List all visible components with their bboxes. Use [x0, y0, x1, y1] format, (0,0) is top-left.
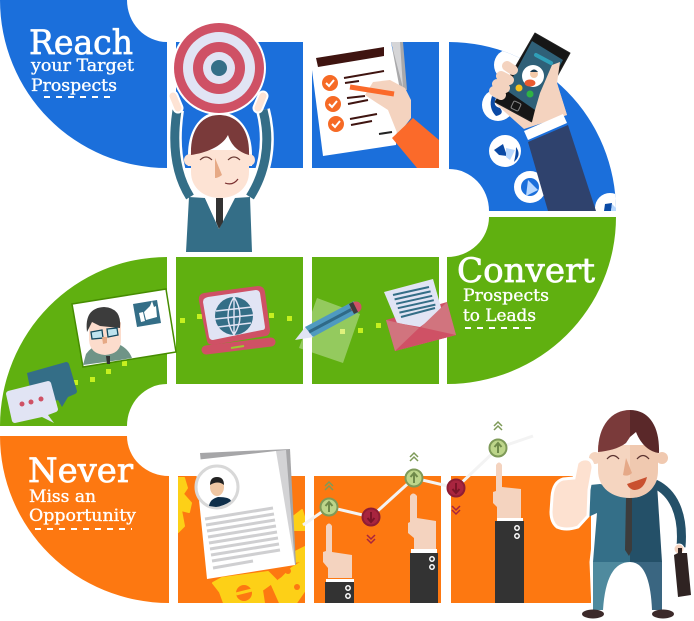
thumb and palm front: [525, 62, 567, 128]
avatar: [209, 477, 231, 507]
heading: Convert Prospects to Leads: Prospects: [463, 286, 549, 306]
tie: [216, 198, 223, 229]
blue quarter panel: [0, 0, 167, 168]
green left curve panel: [0, 257, 167, 426]
call buttons: [516, 84, 522, 92]
blue right curve panel: [449, 42, 616, 211]
page fold: [276, 450, 295, 565]
shirt collar: [204, 196, 235, 229]
teal bubble: [27, 362, 77, 408]
hands: [173, 96, 263, 108]
phone body: [495, 33, 570, 122]
heading: Reach your Target Prospects: Reach: [29, 23, 133, 63]
palm behind phone: [496, 66, 567, 129]
green right curve panel: [447, 217, 616, 384]
orange tile 2: [314, 476, 441, 603]
sheet dots: [340, 329, 345, 334]
icon: pointing hand 2: [408, 494, 438, 603]
icon: businessman thumbs up: [551, 410, 691, 618]
line chart: ups and downs: [303, 422, 533, 543]
hand: [365, 80, 411, 135]
icon: profile card with like: [72, 289, 176, 367]
translucent sheet: [299, 298, 360, 363]
paper shadow: [392, 42, 407, 90]
heading: Reach your Target Prospects: Prospects: [31, 76, 117, 96]
phone screen: [506, 41, 563, 110]
heading: Never Miss an Opportunity: Opportunity: [29, 506, 136, 526]
heading: Never Miss an Opportunity: Miss an: [29, 487, 96, 507]
hair left: [598, 410, 630, 452]
flap: [395, 327, 456, 351]
icon: resume document: [195, 449, 296, 579]
glasses: [91, 328, 118, 339]
face right: [630, 445, 658, 498]
right arm: [655, 484, 681, 547]
shoulders: [83, 344, 132, 365]
eyes: [200, 157, 240, 160]
tie: [625, 498, 632, 556]
up marker 3: [490, 422, 506, 456]
heading: Never Miss an Opportunity: Never: [28, 451, 134, 491]
torso left: [586, 484, 630, 562]
tie: [106, 356, 110, 364]
screen bar: [536, 55, 551, 63]
down marker 1: [362, 508, 380, 543]
globe: [215, 297, 253, 335]
lavender bubble: [6, 381, 58, 423]
orange tile 3: [451, 476, 591, 603]
left pant leg: [593, 562, 630, 610]
briefcase: [674, 548, 691, 597]
sleeve arm: [528, 125, 596, 211]
envelope front: [386, 302, 456, 351]
face: [89, 322, 121, 355]
briefcase hand: [674, 544, 684, 554]
nose: [623, 458, 632, 476]
heading: Convert Prospects to Leads: Convert: [457, 251, 595, 291]
head outline: [189, 113, 251, 165]
smile: [225, 179, 238, 184]
eraser: [350, 302, 362, 312]
letter lines: [393, 287, 435, 317]
icon: man holding target: [173, 96, 267, 252]
back page: [200, 449, 296, 565]
avatar ring: [196, 466, 238, 508]
resume lines: [205, 508, 280, 568]
cuff: [524, 114, 567, 140]
up marker 1: [320, 482, 338, 516]
icon: pointing hand 1: [323, 524, 354, 603]
thumbs up badge: [133, 300, 161, 327]
bubble dots: [20, 396, 44, 406]
left shoe: [582, 610, 604, 618]
envelope back: [386, 302, 456, 351]
laptop base: [206, 342, 271, 350]
white outline: [591, 484, 664, 610]
panel: green convert band: [0, 217, 616, 426]
fingers: [494, 66, 513, 95]
torso right: [630, 484, 662, 562]
heading: Convert Prospects to Leads: to Leads: [463, 306, 536, 326]
paper: [312, 42, 400, 156]
check circles: [322, 75, 344, 132]
nose: [102, 337, 107, 344]
arms: [175, 110, 267, 197]
icon: hand holding phone: [494, 33, 596, 211]
heading: Never Miss an Opportunity: [28, 451, 136, 529]
face left: [598, 445, 630, 498]
dotted path: green band: [73, 313, 381, 385]
hair: [87, 307, 120, 332]
eyes: [607, 456, 649, 459]
paper fold: [391, 42, 403, 88]
blue tile 3: [312, 42, 439, 168]
laptop screen frame: [199, 286, 270, 345]
card: [72, 289, 176, 367]
pencil body: [305, 301, 359, 337]
icon: prospect circles: [482, 51, 616, 211]
trackpad: [231, 346, 244, 348]
torso: [186, 197, 252, 252]
title bar: [316, 47, 384, 67]
orange tile 1: [178, 476, 305, 603]
blue tile 2: [176, 42, 303, 168]
text lines: [344, 71, 384, 125]
laptop screen: [203, 290, 265, 340]
contact avatar: [522, 65, 544, 87]
hair right: [630, 410, 659, 453]
face: [191, 150, 249, 198]
chart line: [303, 436, 533, 525]
heading: Reach your Target Prospects: your Target: [30, 56, 134, 76]
right shoe: [652, 610, 674, 618]
pencil: [350, 87, 394, 94]
up marker 2: [406, 453, 422, 486]
icon: puzzle gears: [178, 478, 305, 603]
green tile 1: [176, 257, 303, 384]
pencil tip: [295, 326, 314, 340]
icon: laptop with globe: [199, 286, 271, 350]
icon: target: [172, 21, 266, 115]
pencil stripe: [309, 307, 356, 332]
heading: Reach your Target Prospects: [29, 23, 134, 97]
panel: orange opportunity band: [0, 436, 591, 603]
ferrule: [349, 302, 358, 314]
heading: Convert Prospects to Leads: [457, 251, 595, 328]
nose: [215, 158, 222, 178]
illustration: checklist and hand: [312, 42, 439, 168]
home button: [511, 101, 521, 111]
icon: chat bubbles: [6, 362, 77, 423]
icon: pointing hand 3: [493, 462, 524, 603]
front page: [195, 451, 295, 579]
ears: [589, 452, 601, 464]
down marker 2: [448, 480, 464, 514]
right pant leg: [630, 562, 662, 610]
icon: envelope: [384, 279, 456, 351]
panel: blue reach band: [0, 0, 616, 211]
sleeve: [392, 118, 439, 168]
hair: [191, 115, 249, 155]
green tile 2: [312, 257, 439, 384]
orange left quarter: [0, 436, 169, 603]
ears: [184, 154, 196, 166]
thumbs-up hand: [551, 459, 593, 529]
letter: [384, 279, 442, 327]
icon: pencil on translucent sheet: [295, 298, 362, 363]
mouth: [627, 477, 647, 490]
